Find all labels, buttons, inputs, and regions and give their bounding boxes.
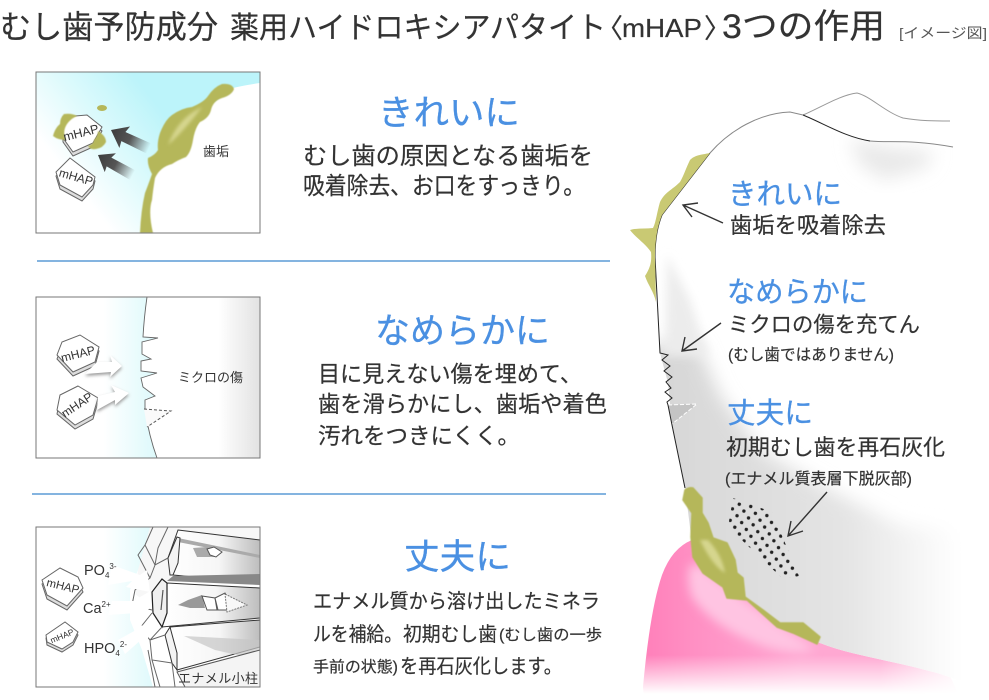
mineral labels: 4 — [115, 649, 120, 658]
hexagon with plaque — [53, 114, 106, 156]
enamel prisms — [130, 527, 260, 687]
block: strengthening copy: (むし歯の一歩 — [499, 626, 602, 644]
white arrows — [85, 355, 129, 412]
front tooth — [660, 140, 946, 676]
block: cleaning copy: 吸着除去、お口をすっきり。 — [303, 173, 585, 200]
hexagon a: mHAP — [59, 343, 97, 365]
callout: strengthening — [725, 397, 945, 536]
callout: smoothing — [682, 277, 920, 364]
hexagon small — [46, 622, 78, 652]
hexagon b — [57, 386, 98, 429]
block: smoothing copy: なめらかに — [375, 312, 550, 351]
gumline plaque — [683, 488, 820, 644]
block: strengthening copy: ルを補給。 — [313, 623, 402, 646]
tooth surface — [147, 83, 260, 233]
mineral labels: PO — [84, 563, 105, 579]
panel: smoothing illustration — [36, 297, 260, 458]
label: enamel rods: エナメル小柱 — [178, 671, 258, 686]
tooth with micro scratches — [141, 297, 260, 458]
hexagon b: mHAP — [59, 390, 95, 420]
block: strengthening copy — [313, 538, 602, 678]
mineral labels: Ca — [83, 601, 102, 617]
plaque fleck — [97, 105, 107, 111]
block: cleaning copy — [303, 94, 593, 200]
mineral labels: 2- — [120, 640, 127, 649]
title: 薬用ハイドロキシアパタイト — [230, 12, 606, 45]
title: [イメージ図] — [899, 25, 987, 41]
title: mHAP — [622, 13, 702, 43]
hexagon — [56, 158, 95, 201]
plaque — [140, 84, 234, 233]
hexagon a — [57, 335, 99, 376]
callout: strengthening: (エナメル質表層下脱灰部) — [725, 470, 912, 488]
panel: cleaning illustration — [36, 72, 260, 233]
hexagon with plaque: mHAP — [62, 122, 100, 144]
hexagon: mHAP — [57, 165, 95, 189]
lesion dots — [728, 498, 799, 579]
title: 〉 — [704, 14, 731, 44]
callout: strengthening: 初期むし歯を再石灰化 — [726, 435, 945, 460]
top plaque — [630, 153, 710, 302]
mineral arrows — [108, 565, 152, 654]
divider two — [32, 493, 606, 495]
hexagon large: mHAP — [45, 577, 81, 597]
block: strengthening copy: を再石灰化します。 — [400, 655, 562, 678]
mineral labels: 2+ — [102, 600, 111, 609]
hexagon large — [42, 568, 83, 610]
block: smoothing copy: 汚れをつきにくく。 — [318, 424, 520, 449]
label: plaque: 歯垢 — [203, 144, 229, 159]
block: strengthening copy: 初期むし歯 — [403, 623, 497, 646]
block: strengthening copy: 丈夫に — [404, 538, 511, 577]
hexagon small: mHAP — [49, 627, 76, 645]
block: cleaning copy: きれいに — [378, 94, 520, 133]
dashed crack — [668, 404, 697, 424]
title: 〈 — [596, 14, 623, 44]
block: strengthening copy: エナメル質から溶け出したミネラ — [313, 590, 600, 613]
title: 3つの作用 — [722, 8, 885, 46]
block: cleaning copy: むし歯の原因となる歯垢を — [303, 143, 593, 170]
callout: cleaning: 歯垢を吸着除去 — [730, 213, 886, 238]
callout: smoothing: なめらかに — [727, 277, 868, 309]
back tooth outline — [803, 93, 950, 121]
callout: cleaning — [683, 179, 886, 238]
callout: cleaning: きれいに — [728, 179, 842, 211]
block: smoothing copy: 歯を滑らかにし、歯垢や着色 — [318, 392, 607, 417]
block: smoothing copy: 目に見えない傷を埋めて、 — [318, 362, 582, 387]
callout: smoothing: ミクロの傷を充てん — [728, 313, 920, 337]
block: strengthening copy: 手前の状態) — [313, 658, 398, 676]
callout: strengthening: 丈夫に — [727, 397, 813, 430]
filled crack outline — [144, 409, 171, 427]
arrows toward plaque — [92, 120, 154, 184]
mineral labels: 4 — [105, 571, 110, 580]
tooth illustration — [630, 92, 953, 692]
title — [0, 8, 987, 46]
callout: smoothing: (むし歯ではありません) — [728, 346, 894, 364]
tooth outline — [710, 112, 953, 153]
divider one — [37, 260, 610, 262]
label: micro scratch: ミクロの傷 — [178, 370, 243, 385]
mineral labels — [83, 562, 127, 658]
mineral labels: HPO — [84, 641, 115, 657]
gum — [630, 540, 970, 698]
title: むし歯予防成分 — [0, 9, 218, 45]
block: smoothing copy — [318, 312, 607, 449]
mineral labels: 3- — [109, 562, 117, 571]
panel: remineralization illustration — [36, 527, 260, 687]
